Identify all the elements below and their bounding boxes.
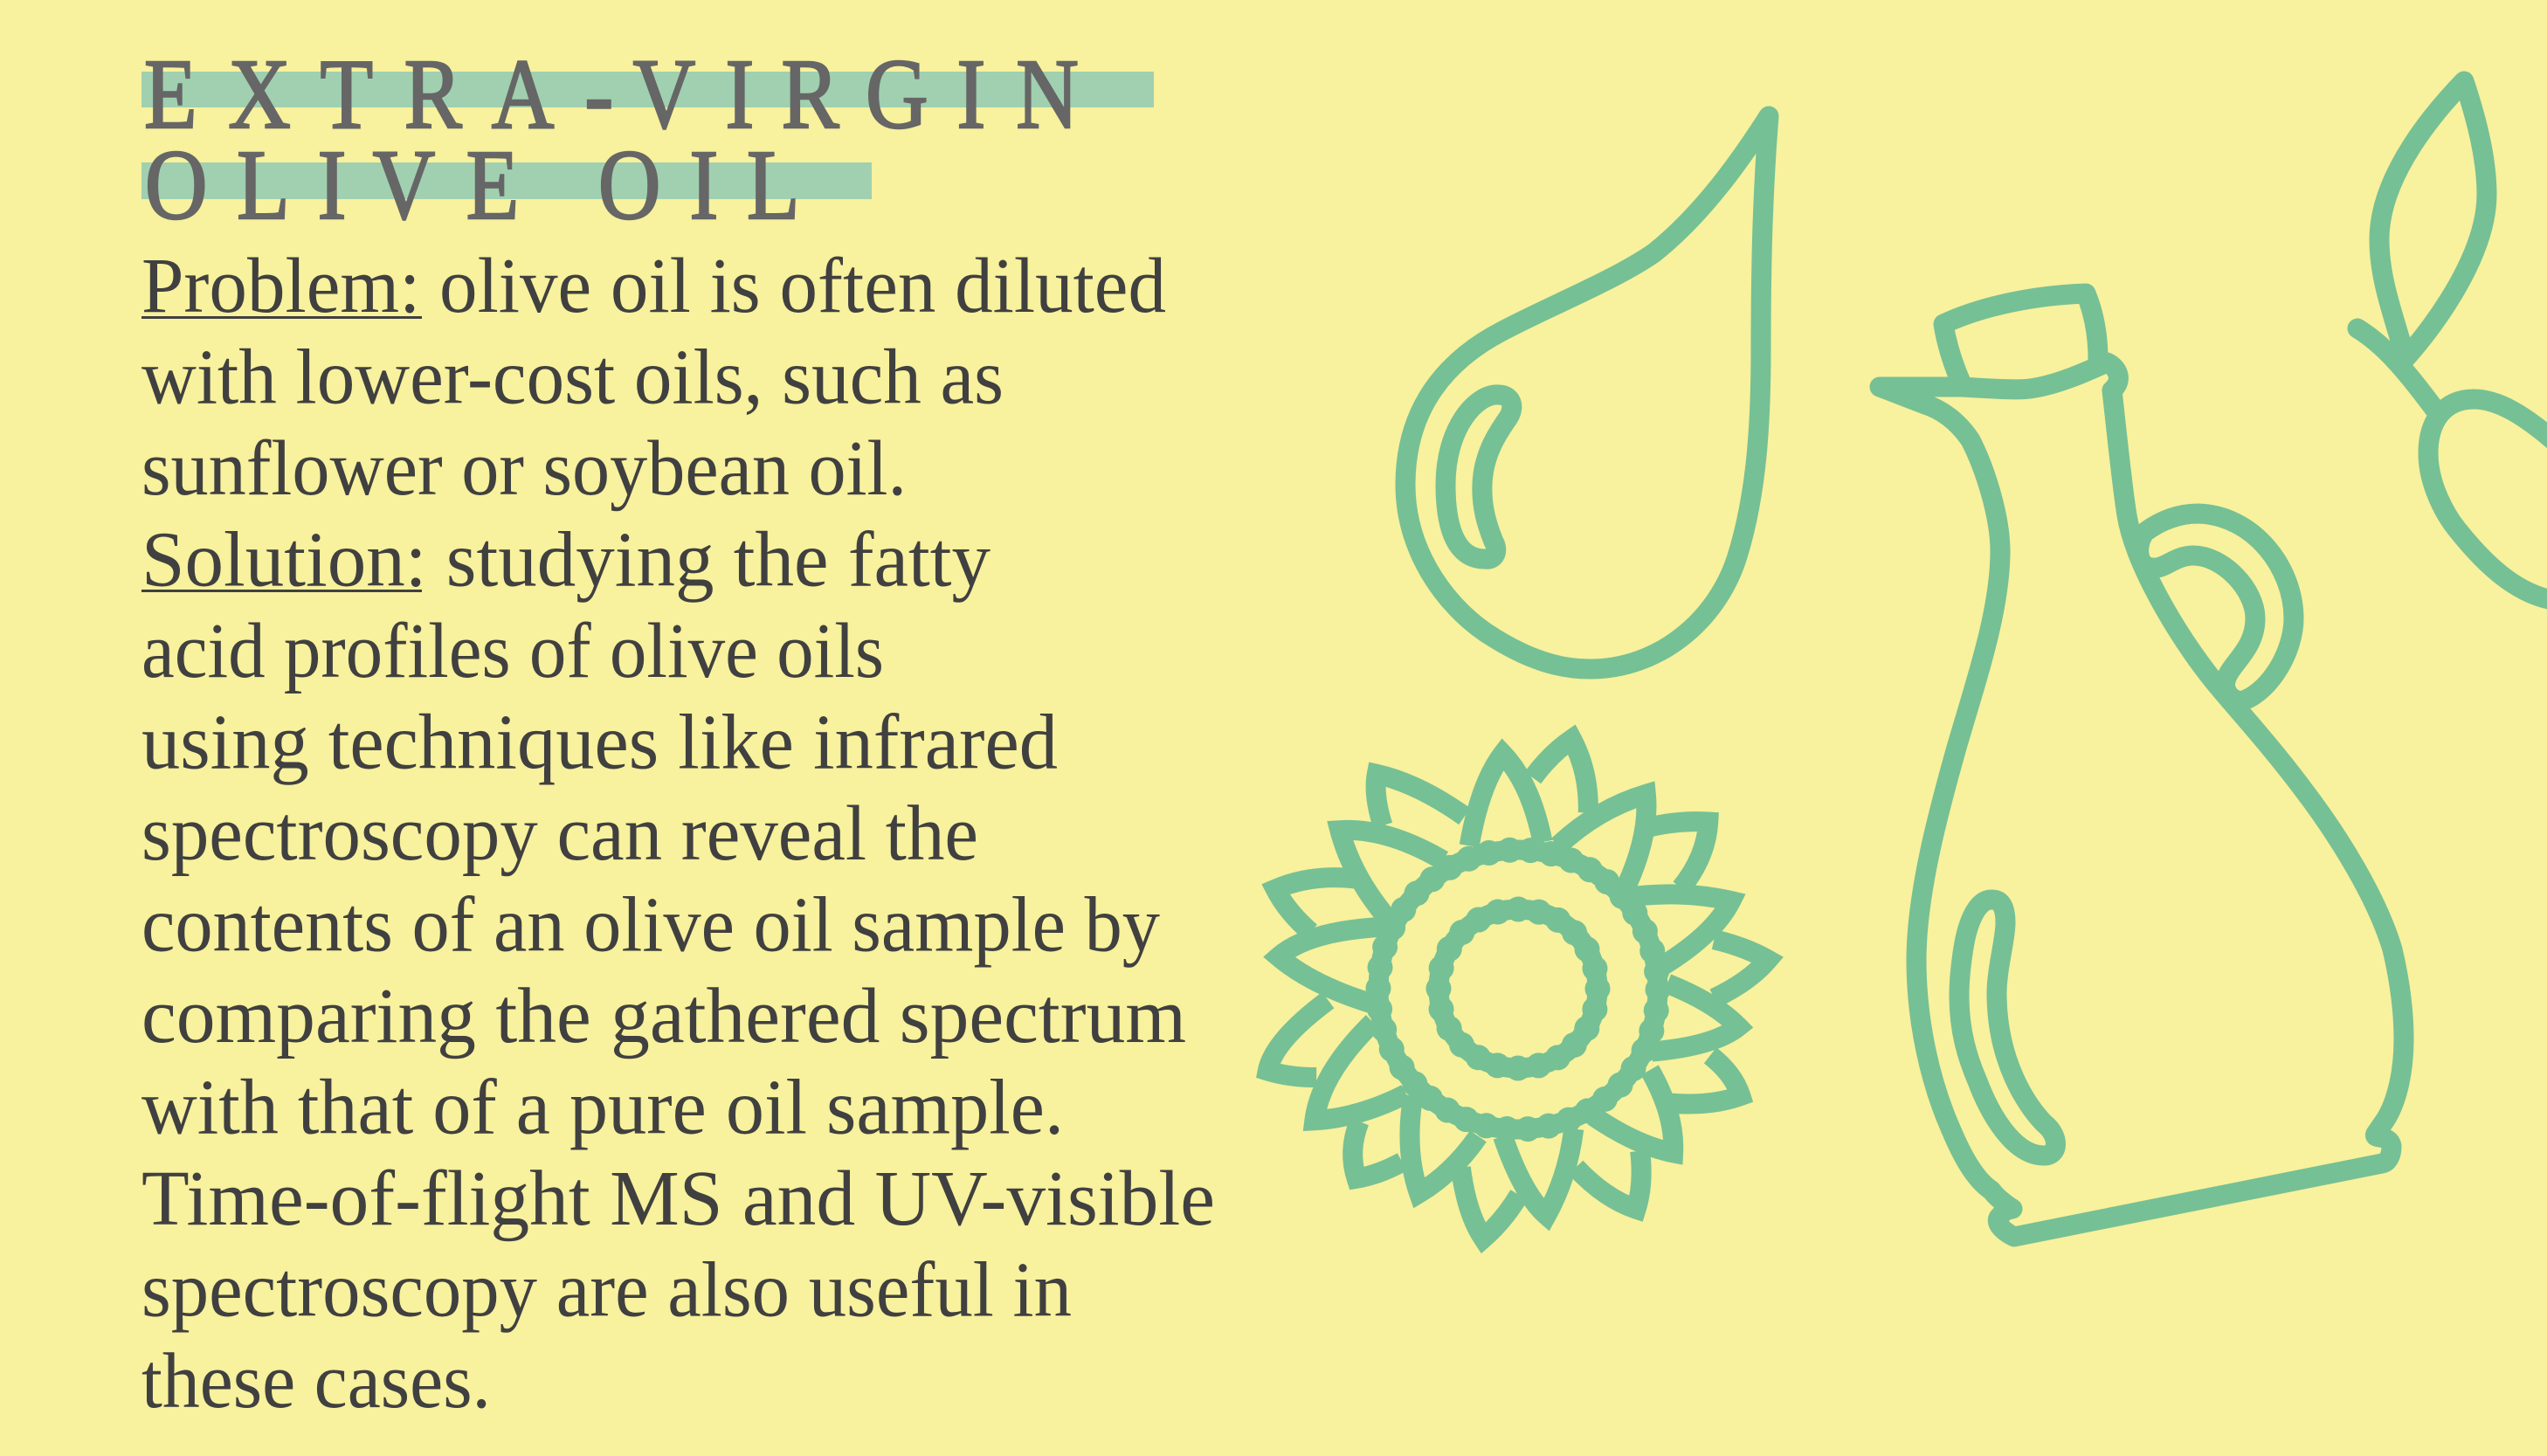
body text: acid profiles of olive oils — [142, 608, 884, 694]
body text: with that of a pure oil sample. — [142, 1064, 1064, 1151]
icon: sunflower centre rings — [1378, 850, 1658, 1129]
icon: oil bottle — [1880, 293, 2404, 1237]
title: OLIVE OIL — [145, 131, 800, 241]
body text: these cases. — [142, 1338, 491, 1425]
icon: olive branch — [2357, 81, 2547, 601]
body text: Problem: olive oil is often diluted — [142, 243, 1166, 329]
body text: contents of an olive oil sample by — [142, 882, 1160, 968]
body text: sunflower or soybean oil. — [142, 425, 907, 512]
body text: comparing the gathered spectrum — [142, 973, 1186, 1059]
icon: oil drop — [1405, 116, 1769, 669]
body text: with lower-cost oils, such as — [142, 334, 1004, 421]
body text: Time-of-flight MS and UV-visible — [142, 1156, 1215, 1242]
body text: spectroscopy can reveal the — [142, 790, 978, 877]
icon: sunflower — [1267, 739, 1768, 1239]
title: EXTRA-VIRGIN — [144, 40, 1079, 150]
title — [142, 40, 1154, 241]
body text — [142, 243, 1215, 1425]
body text: spectroscopy are also useful in — [142, 1247, 1072, 1333]
body text: using techniques like infrared — [142, 699, 1058, 786]
body text: Solution: studying the fatty — [142, 517, 990, 603]
